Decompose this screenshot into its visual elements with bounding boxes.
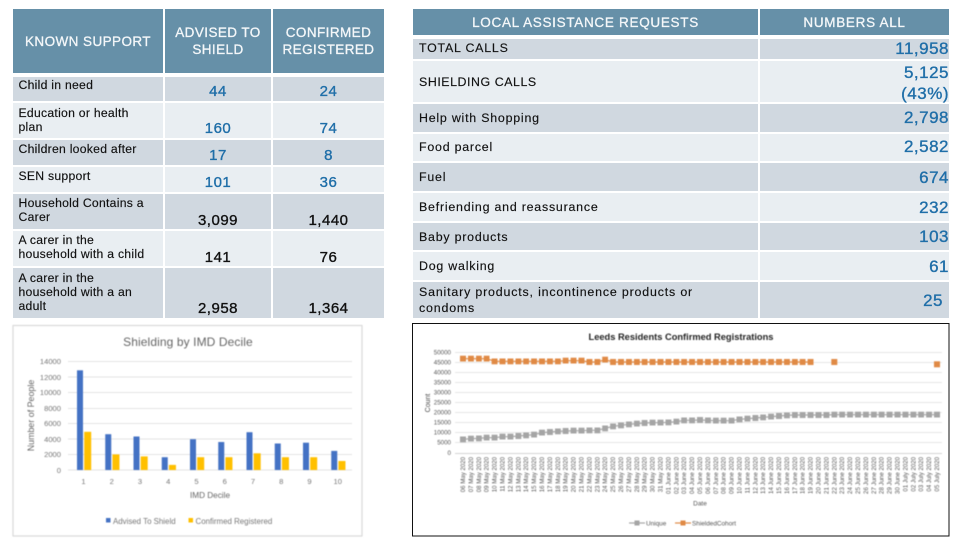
row: education or health plan: 74 <box>320 120 337 137</box>
row: children looked after: 8 <box>324 147 333 164</box>
y axis labels: 35000 <box>434 380 452 386</box>
x axis labels: 4 <box>166 477 170 486</box>
x axis labels: 8 <box>279 477 283 486</box>
blue bars: advised to shield <box>77 370 337 470</box>
x axis date labels: 19 May 2020 <box>563 456 570 492</box>
x axis date labels: 26 May 2020 <box>618 456 625 492</box>
x axis date labels: 01 June 2020 <box>665 456 672 494</box>
x axis date labels: 05 July 2020 <box>934 456 941 492</box>
x axis date labels: 28 May 2020 <box>634 456 641 492</box>
x axis date labels: 14 June 2020 <box>768 456 775 494</box>
bar chart: shielding by IMD decile <box>13 326 362 536</box>
legend: Confirmed Registered <box>196 517 272 526</box>
row: fuel: 674 <box>919 168 949 187</box>
x axis date labels: 02 June 2020 <box>673 456 680 494</box>
row: child in need <box>13 77 384 101</box>
yellow bars: confirmed registered <box>84 432 345 470</box>
x axis date labels: 06 May 2020 <box>460 456 467 492</box>
y axis labels: 20000 <box>434 410 452 416</box>
row: dog walking: 61 <box>929 256 949 276</box>
row: shielding calls: 5,125 <box>904 63 949 82</box>
line chart: Leeds residents confirmed registrations <box>412 324 949 536</box>
row: carer with a child: household with a child <box>18 247 144 261</box>
row: household contains a carer: 3,099 <box>198 212 238 228</box>
x axis date labels: 29 June 2020 <box>887 456 894 494</box>
y axis labels: 14000 <box>40 357 61 366</box>
x axis date labels: 17 June 2020 <box>792 456 799 494</box>
header: numbers all <box>760 9 949 35</box>
row: children looked after: Children looked after <box>18 142 137 156</box>
chart title: Shielding by IMD Decile <box>123 335 253 349</box>
row: dog walking <box>413 252 949 280</box>
y axis labels: 6000 <box>44 419 61 428</box>
row: carer with a child: 76 <box>320 248 337 266</box>
y axis labels: 10000 <box>434 430 452 436</box>
row: befriending and reassurance <box>413 193 949 221</box>
x axis date labels: 27 June 2020 <box>871 456 878 494</box>
row: SEN support: SEN support <box>18 169 91 183</box>
x axis date labels: 05 June 2020 <box>697 456 704 494</box>
row: carer with an adult: household with a an <box>18 285 132 299</box>
row: sanitary products: 25 <box>923 291 943 310</box>
row: education or health plan: 160 <box>205 120 231 137</box>
row: shielding calls: (43%) <box>901 84 949 103</box>
row: carer with a child: 141 <box>205 248 231 266</box>
x axis labels: 1 <box>81 477 86 486</box>
x axis date labels: 10 June 2020 <box>736 456 744 494</box>
legend <box>629 520 736 528</box>
y axis labels: 45000 <box>434 360 452 366</box>
x axis labels: 2 <box>110 477 114 486</box>
x axis date labels: 20 June 2020 <box>816 456 822 494</box>
row: SEN support: 36 <box>320 174 337 191</box>
header: known support: KNOWN SUPPORT <box>25 34 151 48</box>
row: child in need: 44 <box>209 83 227 100</box>
x axis date labels: 09 June 2020 <box>729 456 736 494</box>
row: befriending and reassurance: Befriending and reassurance <box>419 200 598 214</box>
row: fuel <box>413 163 949 191</box>
row: carer with a child <box>13 231 384 266</box>
y axis labels: 4000 <box>44 435 61 444</box>
header: local assistance requests <box>413 9 758 35</box>
x axis date labels: 16 June 2020 <box>784 456 791 494</box>
row: child in need: 24 <box>320 83 337 100</box>
row: education or health plan: plan <box>18 120 43 134</box>
x axis date labels: 21 June 2020 <box>823 456 830 494</box>
x axis date labels: 08 June 2020 <box>721 456 728 494</box>
header: confirmed registered: REGISTERED <box>283 42 374 57</box>
row: total calls <box>413 39 949 59</box>
x axis date labels: 30 May 2020 <box>650 456 657 492</box>
header: advised to shield: SHIELD <box>192 42 244 57</box>
header: confirmed registered <box>273 9 384 73</box>
x axis date labels: 23 June 2020 <box>839 456 846 494</box>
x axis date labels: 25 May 2020 <box>610 456 617 492</box>
x axis date labels: 24 May 2020 <box>602 456 609 492</box>
y axis title: Count <box>425 394 432 412</box>
y axis labels: 12000 <box>40 373 61 382</box>
x axis labels <box>81 477 342 486</box>
y axis labels <box>40 357 61 475</box>
shielded cohort: isolated points <box>831 359 940 367</box>
x axis labels: 6 <box>223 477 227 486</box>
x axis date labels: 15 June 2020 <box>776 456 783 494</box>
x axis date labels: 10 May 2020 <box>492 456 499 492</box>
x axis date labels: 08 May 2020 <box>476 456 483 492</box>
header: local assistance requests: LOCAL ASSISTANCE REQUESTS <box>472 14 699 30</box>
x axis date labels: 07 May 2020 <box>468 456 475 492</box>
x axis date labels: 06 June 2020 <box>705 456 712 494</box>
y axis labels <box>434 350 452 457</box>
x axis date labels: 02 July 2020 <box>910 456 917 492</box>
x axis date labels: 26 June 2020 <box>863 456 870 494</box>
row: household contains a carer: 1,440 <box>308 212 349 228</box>
x axis date labels: 13 May 2020 <box>515 456 522 492</box>
x axis date labels: 23 May 2020 <box>594 456 601 492</box>
y axis labels: 0 <box>57 466 61 475</box>
legend: Unique <box>646 520 667 528</box>
x axis date labels: 09 May 2020 <box>484 456 491 492</box>
row: household contains a carer: Household Contains a <box>18 196 144 210</box>
header: known support <box>13 9 163 73</box>
x axis labels: 3 <box>138 477 142 486</box>
x axis date labels: 11 May 2020 <box>500 456 506 492</box>
y axis labels: 25000 <box>434 400 452 406</box>
row: help with shopping: Help with Shopping <box>419 111 540 125</box>
y axis labels: 30000 <box>434 390 452 396</box>
row: carer with an adult <box>13 268 384 318</box>
y axis labels: 5000 <box>437 440 452 446</box>
x axis date labels <box>460 456 941 494</box>
row: fuel: Fuel <box>419 170 446 184</box>
x axis date labels: 21 May 2020 <box>578 456 586 492</box>
row: total calls: 11,958 <box>895 39 949 58</box>
row: dog walking: Dog walking <box>419 259 495 273</box>
x axis date labels: 14 May 2020 <box>523 456 530 492</box>
series: unique <box>463 415 937 439</box>
row: help with shopping: 2,798 <box>904 108 949 127</box>
panel: local assistance requests table <box>413 9 949 318</box>
row: sanitary products <box>413 282 949 318</box>
row: carer with an adult: 2,958 <box>198 300 238 316</box>
x axis date labels: 16 May 2020 <box>539 456 546 492</box>
x axis date labels: 24 June 2020 <box>847 456 854 494</box>
row: shielding calls <box>413 61 949 103</box>
row: children looked after <box>13 140 384 165</box>
row: SEN support <box>13 167 384 192</box>
row: shielding calls: SHIELDING CALLS <box>419 74 537 88</box>
header: advised to shield: ADVISED TO <box>175 25 261 40</box>
panel: known support table <box>13 9 384 318</box>
x axis date labels: 03 June 2020 <box>681 456 688 494</box>
row: carer with an adult: A carer in the <box>18 271 94 285</box>
x axis date labels: 20 May 2020 <box>571 456 578 492</box>
y axis title: Number of People <box>26 380 36 451</box>
row: food parcel: Food parcel <box>419 140 493 154</box>
row: SEN support: 101 <box>205 174 231 191</box>
x axis date labels: 22 May 2020 <box>586 456 593 492</box>
x axis date labels: 13 June 2020 <box>760 456 767 494</box>
x axis date labels: 11 June 2020 <box>744 456 751 493</box>
x axis date labels: 22 June 2020 <box>831 456 838 494</box>
y axis labels: 8000 <box>44 404 61 413</box>
x axis date labels: 17 May 2020 <box>547 456 554 492</box>
x axis date labels: 18 May 2020 <box>555 456 562 492</box>
row: household contains a carer: Carer <box>18 210 50 224</box>
x axis date labels: 01 July 2020 <box>902 456 909 492</box>
x axis date labels: 29 May 2020 <box>642 456 649 492</box>
row: help with shopping <box>413 104 949 132</box>
row: sanitary products: condoms <box>419 301 475 315</box>
x axis date labels: 12 May 2020 <box>507 456 514 492</box>
row: total calls: TOTAL CALLS <box>419 41 509 55</box>
header: numbers all: NUMBERS ALL <box>803 14 906 30</box>
row: education or health plan: Education or health <box>18 106 129 120</box>
y axis labels: 10000 <box>40 388 61 397</box>
row: household contains a carer <box>13 194 384 229</box>
x axis date labels: 07 June 2020 <box>713 456 720 494</box>
header: confirmed registered: CONFIRMED <box>286 25 371 40</box>
y axis labels: 40000 <box>434 370 452 376</box>
x axis labels: 10 <box>334 477 342 486</box>
y axis labels: 0 <box>448 450 452 457</box>
legend <box>106 517 272 526</box>
row: baby products <box>413 223 949 250</box>
chart title: Leeds Residents Confirmed Registrations <box>589 332 773 342</box>
x axis date labels: 03 July 2020 <box>918 456 925 492</box>
x axis date labels: 28 June 2020 <box>879 456 886 494</box>
x axis title: Date <box>693 500 707 508</box>
x axis date labels: 19 June 2020 <box>808 456 815 494</box>
x axis labels: 5 <box>194 477 199 486</box>
x axis date labels: 04 June 2020 <box>689 456 696 494</box>
x axis date labels: 27 May 2020 <box>626 456 633 492</box>
x axis date labels: 04 July 2020 <box>926 456 933 492</box>
row: carer with an adult: 1,364 <box>308 300 349 316</box>
x axis labels: 7 <box>251 477 255 486</box>
x axis labels: 9 <box>307 477 312 486</box>
x axis date labels: 25 June 2020 <box>855 456 862 494</box>
header: advised to shield <box>165 9 271 73</box>
legend: Advised To Shield <box>113 517 176 526</box>
x axis date labels: 15 May 2020 <box>531 456 538 492</box>
row: carer with a child: A carer in the <box>18 233 94 247</box>
row: carer with an adult: adult <box>18 299 46 313</box>
x axis title: IMD Decile <box>190 491 230 500</box>
x axis date labels: 31 May 2020 <box>658 456 664 492</box>
x axis date labels: 30 June 2020 <box>894 456 902 494</box>
y axis labels: 15000 <box>434 420 452 426</box>
row: food parcel: 2,582 <box>904 137 949 156</box>
x axis date labels: 18 June 2020 <box>800 456 807 494</box>
y axis labels: 2000 <box>44 450 61 459</box>
row: food parcel <box>413 134 949 161</box>
row: baby products: Baby products <box>419 230 508 244</box>
x axis date labels: 12 June 2020 <box>752 456 759 494</box>
legend: ShieldedCohort <box>692 520 736 528</box>
row: baby products: 103 <box>919 226 949 246</box>
row: sanitary products: Sanitary products, incontinence products or <box>419 285 693 299</box>
row: children looked after: 17 <box>209 147 227 164</box>
row: education or health plan <box>13 103 384 138</box>
y axis labels: 50000 <box>434 350 452 356</box>
series: shielded cohort <box>463 359 811 362</box>
row: befriending and reassurance: 232 <box>919 198 949 216</box>
row: child in need: Child in need <box>18 78 93 92</box>
